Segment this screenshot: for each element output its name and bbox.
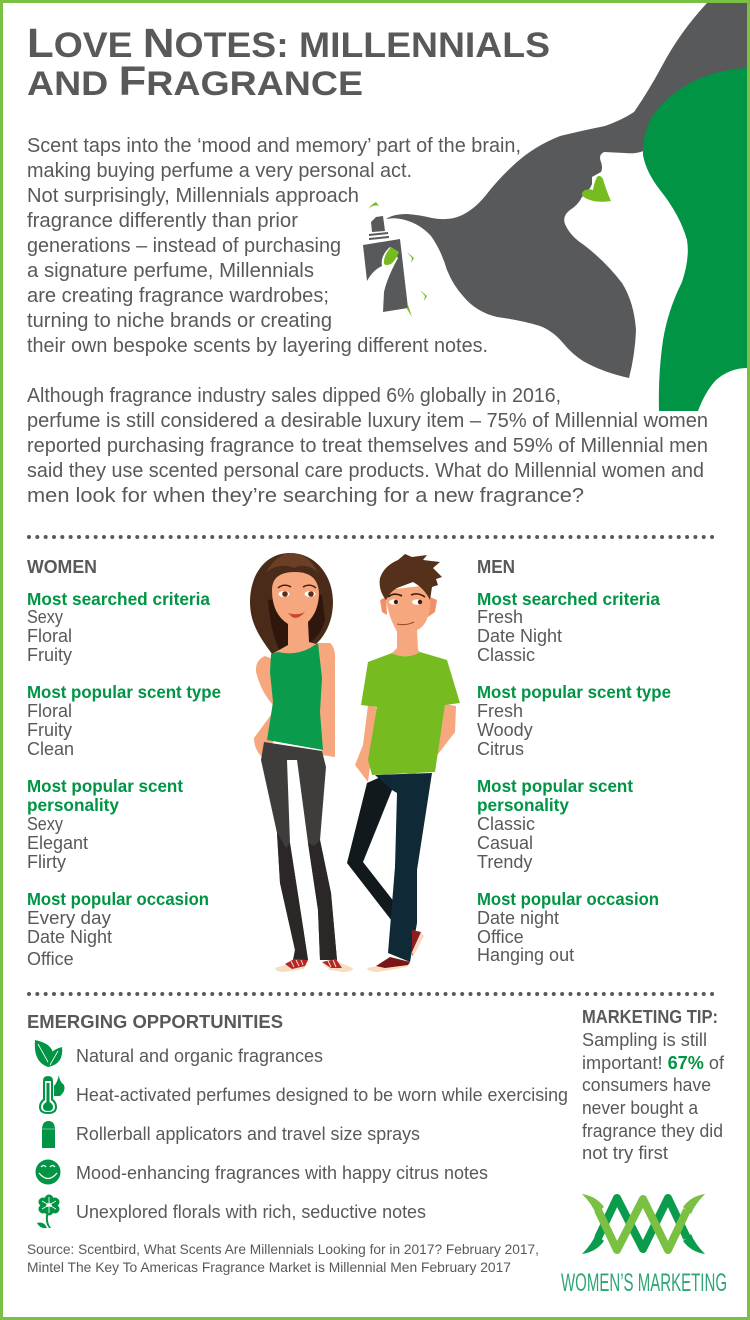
finger nail bbox=[384, 247, 399, 265]
face bbox=[385, 585, 431, 637]
intro paragraph: generations – instead of purchasing bbox=[27, 234, 341, 257]
green lips bbox=[582, 176, 611, 202]
most searched criteria: Sexy bbox=[27, 607, 63, 627]
most popular scent type: Woody bbox=[477, 720, 533, 740]
illustration: woman's profile with hair and perfume bottle bbox=[363, 3, 747, 411]
most popular scent personality: personality bbox=[477, 795, 569, 815]
neck bbox=[392, 630, 420, 656]
callout: marketing tip: not try first bbox=[582, 1142, 668, 1163]
intro paragraph bbox=[27, 134, 521, 357]
perfume bottle bbox=[363, 216, 408, 312]
callout: marketing tip: important! 67% of bbox=[582, 1052, 725, 1073]
title: LOVE NOTES: MILLENNIALS bbox=[27, 20, 550, 66]
most popular scent type bbox=[477, 682, 671, 759]
icon: thermometer and flame bbox=[39, 1075, 64, 1114]
heading: women: WOMEN bbox=[27, 557, 97, 577]
t-shirt bbox=[361, 652, 460, 775]
icon: rollerball bbox=[42, 1121, 55, 1148]
eyes and lips bbox=[278, 585, 316, 618]
most popular occasion: Hanging out bbox=[477, 945, 574, 965]
callout: marketing tip: Sampling is still bbox=[582, 1029, 707, 1050]
intro paragraph: are creating fragrance wardrobes; bbox=[27, 284, 329, 307]
most popular occasion: Date night bbox=[477, 908, 559, 928]
text: heat-activated: Heat-activated perfumes designed to be worn while exercising bbox=[76, 1084, 568, 1105]
tank top bbox=[267, 643, 323, 750]
second paragraph: perfume is still considered a desirable luxury item – 75% of Millennial women bbox=[27, 409, 708, 432]
most popular scent type bbox=[27, 682, 221, 759]
panel: emerging opportunities bbox=[27, 1012, 568, 1228]
most searched criteria: Fruity bbox=[27, 645, 72, 665]
most popular scent personality: Sexy bbox=[27, 814, 63, 834]
most searched criteria bbox=[477, 589, 660, 665]
scent sparkles bbox=[368, 202, 427, 317]
intro paragraph: Scent taps into the ‘mood and memory’ part of the brain, bbox=[27, 134, 521, 157]
most popular scent personality: Casual bbox=[477, 833, 533, 853]
most popular scent type: Most popular scent type bbox=[27, 682, 221, 702]
most popular scent type: Floral bbox=[27, 701, 72, 721]
neck bbox=[272, 622, 316, 655]
heading: men: MEN bbox=[477, 557, 515, 577]
most searched criteria bbox=[27, 589, 210, 665]
illustration: woman figure bbox=[250, 553, 353, 972]
most searched criteria: Classic bbox=[477, 645, 535, 665]
intro paragraph: making buying perfume a very personal act. bbox=[27, 159, 412, 182]
most popular occasion bbox=[27, 889, 209, 969]
illustration: man figure bbox=[347, 554, 460, 972]
most popular scent personality bbox=[27, 776, 183, 872]
most searched criteria: Date Night bbox=[477, 626, 562, 646]
callout: marketing tip: MARKETING TIP: bbox=[582, 1007, 718, 1027]
intro paragraph: their own bespoke scents by layering different notes. bbox=[27, 334, 488, 357]
most popular occasion: Office bbox=[27, 949, 74, 969]
shoes bbox=[412, 930, 421, 956]
callout: marketing tip: fragrance they did bbox=[582, 1120, 723, 1141]
most popular occasion: Most popular occasion bbox=[477, 889, 659, 909]
most popular scent personality: Flirty bbox=[27, 852, 66, 872]
most popular occasion: Date Night bbox=[27, 927, 112, 947]
most popular scent personality: Most popular scent bbox=[477, 776, 633, 796]
most searched criteria: Most searched criteria bbox=[477, 589, 660, 609]
icon: flower bbox=[37, 1194, 60, 1228]
second paragraph bbox=[27, 384, 708, 507]
shoes bbox=[275, 961, 353, 972]
intro paragraph: turning to niche brands or creating bbox=[27, 309, 332, 332]
text: rollerball: Rollerball applicators and travel size sprays bbox=[76, 1123, 420, 1144]
dark hair and scent plume bbox=[386, 3, 747, 378]
source note: Source: Scentbird, What Scents Are Millennials Looking for in 2017? February 2017, bbox=[27, 1242, 539, 1257]
logo: Women's Marketing bbox=[561, 1194, 727, 1297]
icon: smiley bbox=[36, 1160, 60, 1184]
most popular scent personality: Elegant bbox=[27, 833, 88, 853]
intro paragraph: fragrance differently than prior bbox=[27, 209, 298, 232]
callout: marketing tip: never bought a bbox=[582, 1097, 699, 1118]
most popular occasion: Every day bbox=[27, 908, 111, 928]
eyes, brows and smile bbox=[388, 594, 425, 625]
most searched criteria: Fresh bbox=[477, 607, 523, 627]
face bbox=[272, 572, 319, 626]
most searched criteria: Floral bbox=[27, 626, 72, 646]
most popular scent type: Fresh bbox=[477, 701, 523, 721]
most popular scent personality: Most popular scent bbox=[27, 776, 183, 796]
text: mood-enhancing: Mood-enhancing fragrances with happy citrus notes bbox=[76, 1162, 488, 1183]
most popular occasion bbox=[477, 889, 659, 965]
callout: marketing tip: consumers have bbox=[582, 1074, 711, 1095]
callout: marketing tip bbox=[582, 1007, 725, 1163]
most popular scent type: Fruity bbox=[27, 720, 72, 740]
most popular scent personality: Classic bbox=[477, 814, 535, 834]
text: unexplored florals: Unexplored florals with rich, seductive notes bbox=[76, 1201, 426, 1222]
green hair bbox=[643, 68, 747, 411]
most popular occasion: Most popular occasion bbox=[27, 889, 209, 909]
ears bbox=[380, 597, 437, 617]
most popular scent personality: personality bbox=[27, 795, 119, 815]
most popular scent type: Citrus bbox=[477, 739, 524, 759]
hair bbox=[380, 554, 442, 600]
heading: EMERGING OPPORTUNITIES bbox=[27, 1012, 283, 1032]
most popular scent personality bbox=[477, 776, 633, 872]
most popular scent type: Clean bbox=[27, 739, 74, 759]
source note: Mintel The Key To Americas Fragrance Market is Millennial Men February 2017 bbox=[27, 1260, 511, 1275]
second paragraph: men look for when they’re searching for a new fragrance? bbox=[27, 484, 584, 507]
arms bbox=[254, 656, 285, 760]
title: AND FRAGRANCE bbox=[27, 58, 363, 104]
most popular occasion: Office bbox=[477, 927, 524, 947]
panel: women bbox=[27, 557, 221, 969]
trousers bbox=[347, 775, 395, 925]
trousers bbox=[261, 742, 337, 960]
icon: leaves bbox=[35, 1040, 62, 1067]
source note bbox=[27, 1242, 539, 1275]
text: natural: Natural and organic fragrances bbox=[76, 1045, 323, 1066]
most popular scent type: Most popular scent type bbox=[477, 682, 671, 702]
title bbox=[27, 20, 550, 104]
second paragraph: reported purchasing fragrance to treat themselves and 59% of Millennial men bbox=[27, 434, 708, 457]
most popular scent personality: Trendy bbox=[477, 852, 532, 872]
most searched criteria: Most searched criteria bbox=[27, 589, 210, 609]
panel: men bbox=[477, 557, 671, 965]
intro paragraph: a signature perfume, Millennials bbox=[27, 259, 314, 282]
intro paragraph: Not surprisingly, Millennials approach bbox=[27, 184, 359, 207]
second paragraph: said they use scented personal care products. What do Millennial women and bbox=[27, 459, 704, 482]
second paragraph: Although fragrance industry sales dipped 6% globally in 2016, bbox=[27, 384, 561, 407]
hair bbox=[250, 553, 333, 654]
arms bbox=[355, 705, 378, 782]
logo mark: light strand bbox=[582, 1194, 705, 1250]
logo mark: dark strand bbox=[582, 1198, 705, 1254]
